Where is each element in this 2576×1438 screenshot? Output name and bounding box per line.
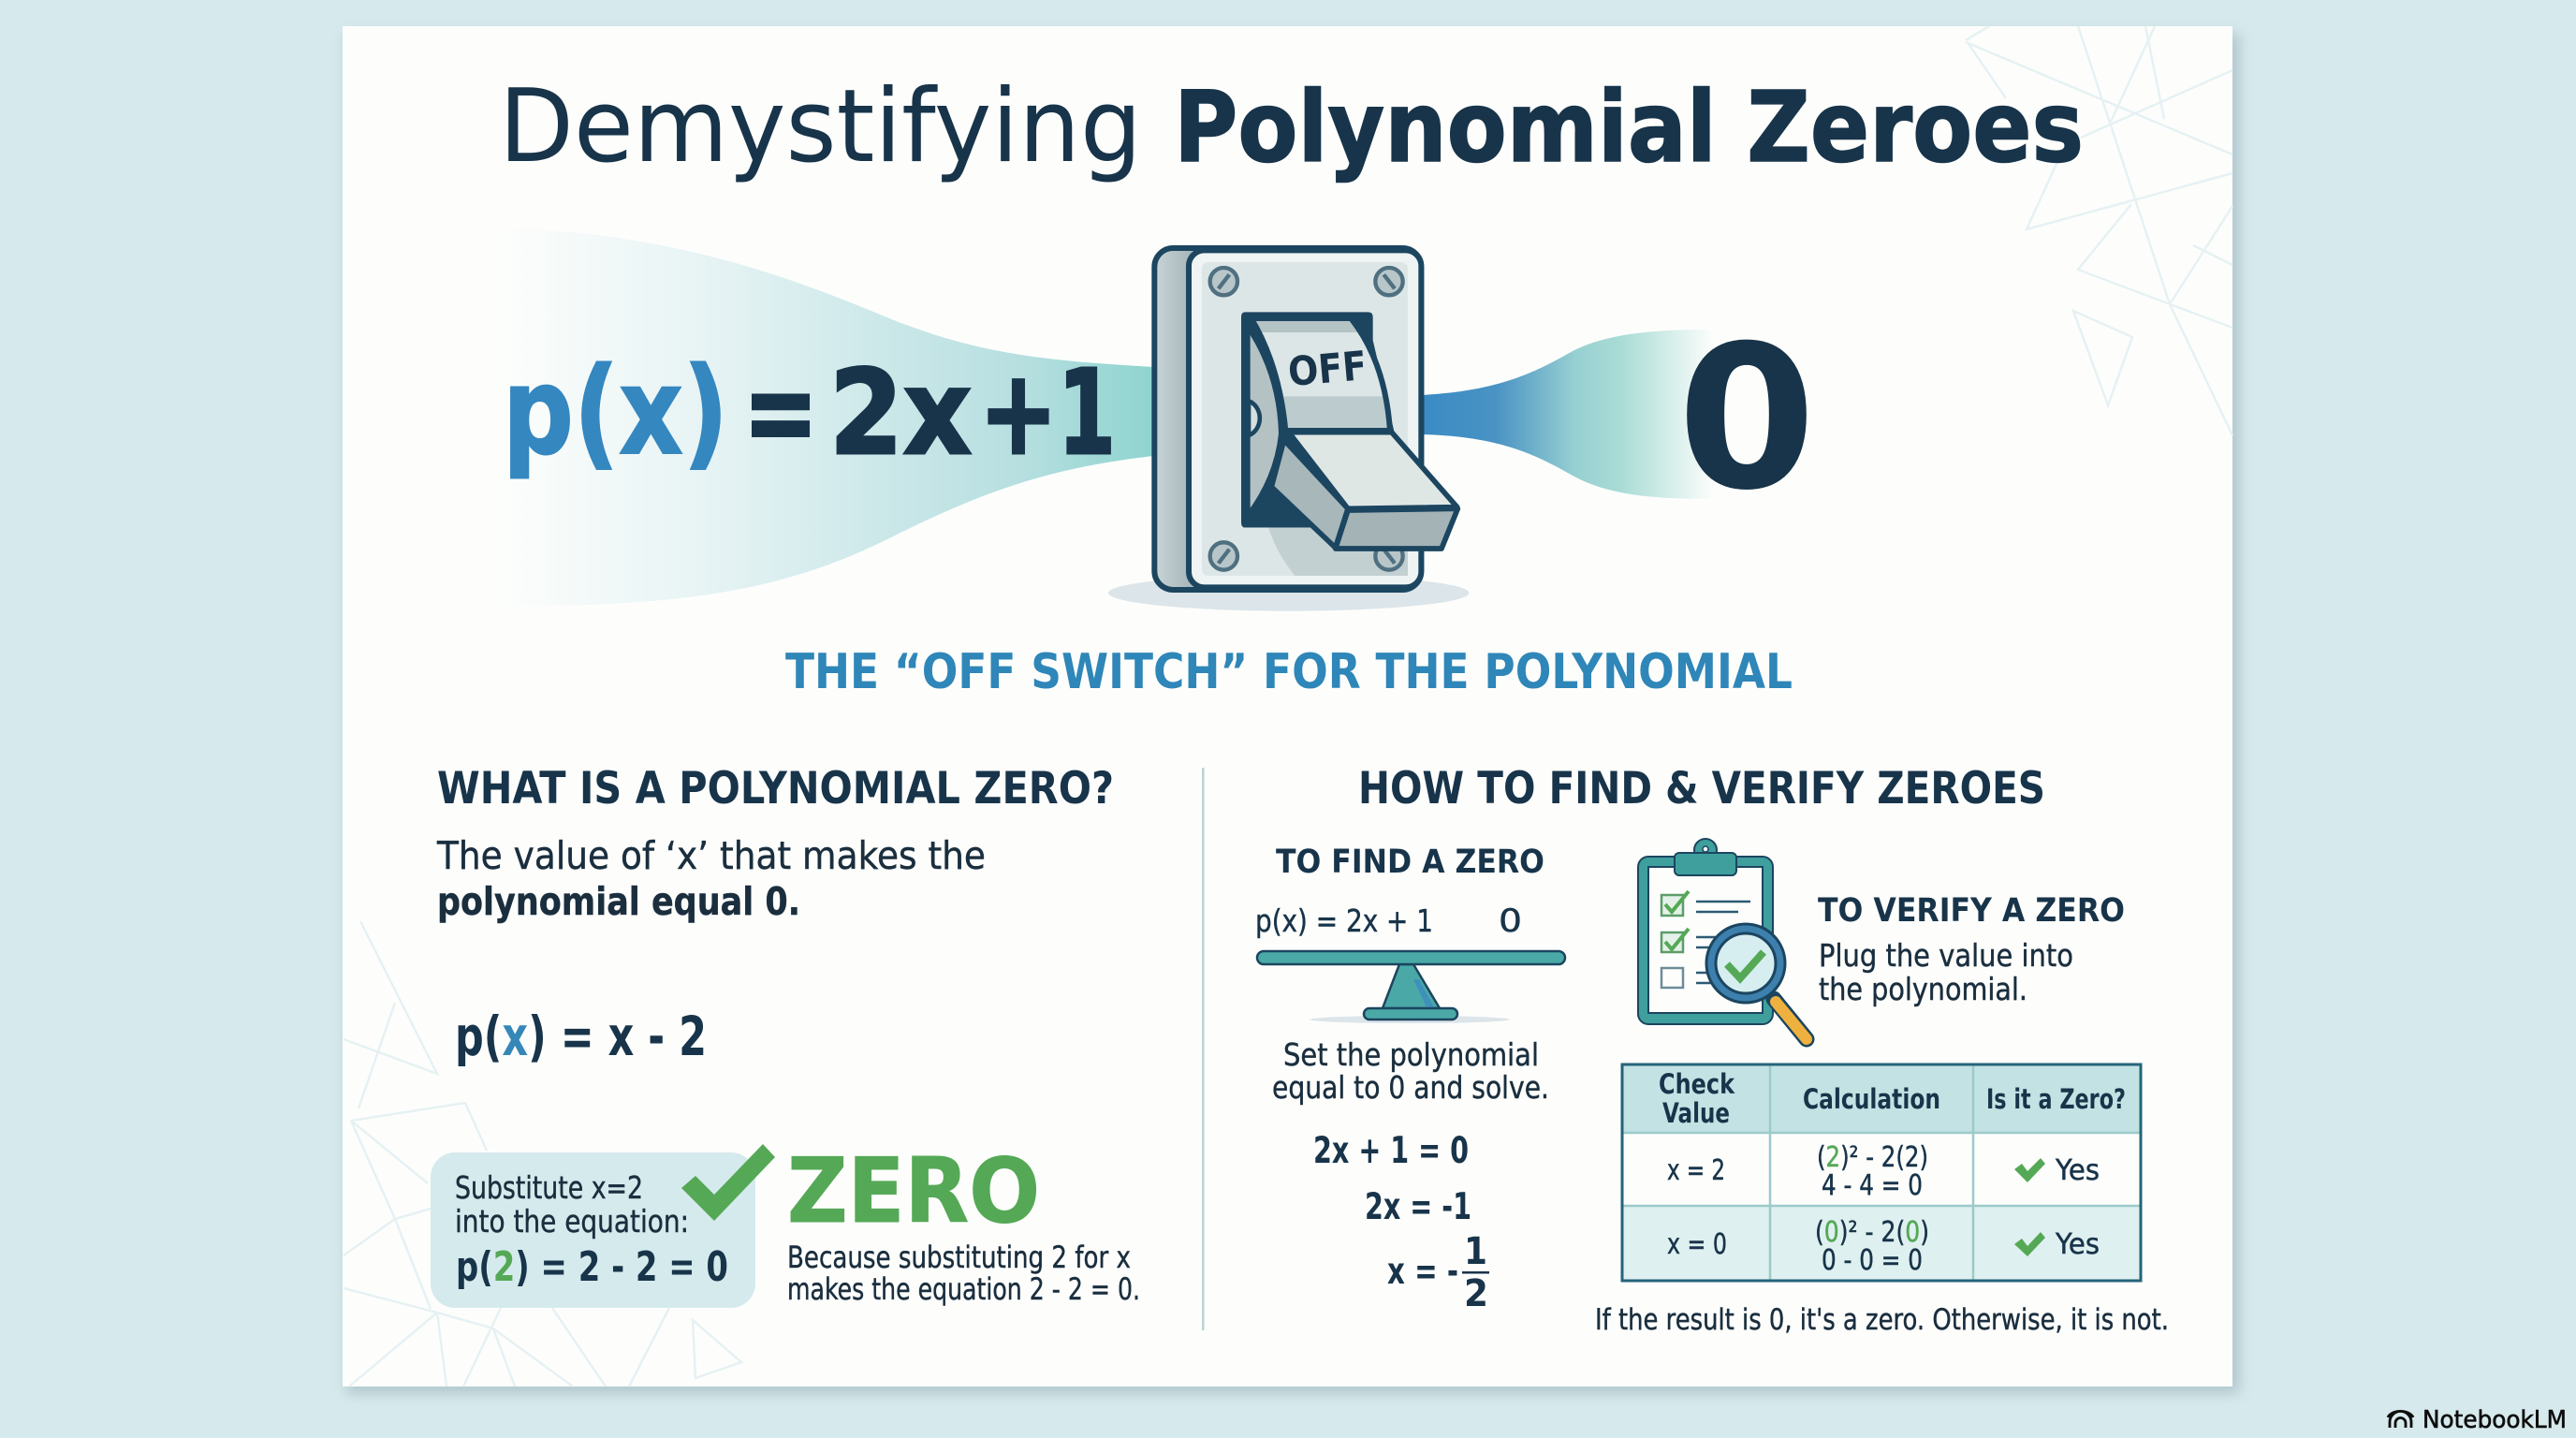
output flow band: [1421, 330, 1715, 499]
verification table: Is it a Zero?: [1986, 1083, 2126, 1115]
verification table: (0)² - 2(0): [1815, 1216, 1929, 1249]
footnote: If the result is 0, it's a zero. Otherwise, it is not.: [1595, 1303, 2169, 1337]
worked solution: [1313, 1130, 1489, 1315]
verification table: x = 2: [1667, 1154, 1725, 1187]
verification table: Calculation: [1803, 1083, 1940, 1115]
panel: how to find and verify: [1255, 763, 2169, 1337]
label: OFF: OFF: [1286, 343, 1368, 396]
instruction: [1272, 1036, 1549, 1106]
input flow band: [468, 227, 1153, 607]
callout: substitution box: into the equation:: [455, 1203, 689, 1240]
icon: check mark: [681, 1144, 775, 1221]
worked solution: 2: [1464, 1272, 1488, 1315]
heading: WHAT IS A POLYNOMIAL ZERO?: [437, 763, 1114, 814]
instruction: equal to 0 and solve.: [1272, 1069, 1549, 1106]
verification table: 0 - 0 = 0: [1822, 1244, 1923, 1277]
callout: substitution box: Substitute x=2: [455, 1169, 643, 1206]
explanation: Because substituting 2 for x: [787, 1240, 1131, 1275]
ZERO label: ZERO: [787, 1140, 1040, 1243]
equation: p(x) = 2x + 1: 2x: [829, 345, 972, 481]
watermark: NotebookLM: NotebookLM: [2422, 1406, 2567, 1434]
worked solution: 2x = -1: [1365, 1186, 1471, 1228]
definition text: polynomial equal 0.: [437, 879, 800, 924]
verification table: Value: [1662, 1097, 1730, 1129]
instruction: the polynomial.: [1819, 971, 2027, 1007]
subheading: TO FIND A ZERO: [1276, 844, 1544, 881]
equation: p(x) = 2x + 1: 1: [1058, 345, 1116, 481]
balance labels: 0: [1499, 902, 1522, 940]
icon: clipboard and magnifier: [1638, 839, 1807, 1039]
verification table: Yes: [2055, 1154, 2100, 1187]
verification table: [1622, 1064, 2141, 1281]
definition text: [436, 833, 986, 924]
sub-panel: to find a zero: [1255, 844, 1565, 1315]
worked solution: x = -: [1387, 1251, 1458, 1293]
verification table: 4 - 4 = 0: [1822, 1169, 1923, 1202]
definition text: The value of ‘x’ that makes the: [436, 833, 986, 878]
decorative geometric lines: [344, 26, 2232, 1387]
verification table: Check: [1659, 1068, 1735, 1100]
icon: light switch: [1108, 248, 1469, 611]
verification table: x = 0: [1667, 1228, 1727, 1261]
explanation: [787, 1240, 1140, 1307]
example equation: p(x) = x - 2: [455, 1005, 707, 1068]
panel: what is a polynomial zero: [431, 763, 1140, 1308]
subheading: TO VERIFY A ZERO: [1818, 892, 2125, 930]
callout: substitution box: [431, 1152, 755, 1308]
equation: p(x) = 2x + 1: p(x): [503, 343, 728, 482]
explanation: makes the equation 2 - 2 = 0.: [787, 1271, 1140, 1307]
result: 0: 0: [1677, 302, 1816, 534]
equation: p(x) = 2x + 1: +: [979, 345, 1058, 481]
equation: p(x) = 2x + 1: =: [743, 343, 818, 482]
verification table: (2)² - 2(2): [1817, 1141, 1928, 1174]
heading: HOW TO FIND & VERIFY ZEROES: [1358, 763, 2045, 814]
subtitle: THE “OFF SWITCH” FOR THE POLYNOMIAL: [785, 644, 1793, 700]
callout: substitution box: p(2) = 2 - 2 = 0: [456, 1243, 728, 1291]
instruction: [1819, 937, 2073, 1007]
sub-panel: to verify a zero: [1595, 839, 2169, 1337]
instruction: Set the polynomial: [1283, 1036, 1539, 1073]
worked solution: 2x + 1 = 0: [1313, 1130, 1469, 1172]
worked solution: 1: [1464, 1230, 1487, 1273]
divider: [1202, 768, 1204, 1330]
icon: balance scale: [1257, 951, 1565, 1023]
title: Polynomial Zeroes: [1174, 70, 2084, 184]
verification table: Yes: [2055, 1228, 2100, 1261]
equation: p(x) = 2x + 1: [503, 343, 1116, 482]
balance labels: p(x) = 2x + 1: [1255, 902, 1433, 939]
instruction: Plug the value into: [1819, 937, 2073, 974]
card panel: [343, 26, 2232, 1387]
title: [499, 68, 2084, 185]
title: Demystifying: [499, 68, 1142, 185]
